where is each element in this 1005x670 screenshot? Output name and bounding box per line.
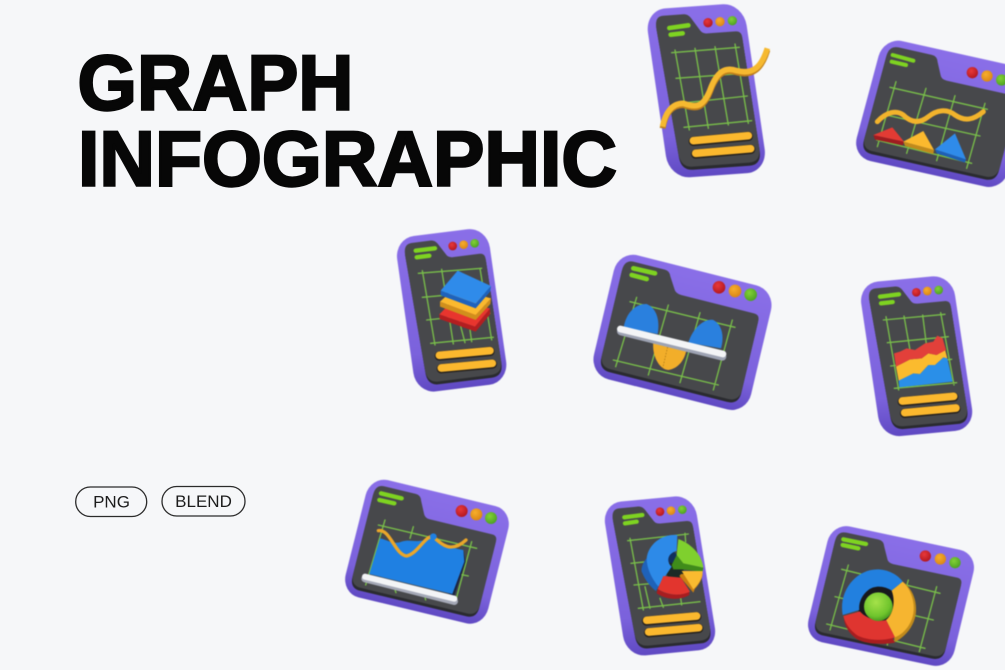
icon: window with line and triangle chart xyxy=(852,37,1005,191)
icon: window with donut chart xyxy=(804,523,978,669)
format tag: PNG: PNG xyxy=(93,492,130,512)
icon: window with blue area chart xyxy=(341,476,513,627)
format tag: BLEND xyxy=(162,486,245,516)
icon: phone with 3D pie chart xyxy=(602,495,718,657)
title xyxy=(78,38,617,202)
title: INFOGRAPHIC xyxy=(78,114,617,202)
format tag: BLEND: BLEND xyxy=(175,492,232,511)
title: GRAPH xyxy=(78,38,354,126)
icon: window with seesaw ellipse chart xyxy=(589,251,776,414)
format tag: PNG xyxy=(76,487,147,516)
icon: phone with stacked area chart xyxy=(858,275,975,438)
icon: phone with stacked layers xyxy=(394,227,509,394)
icon: phone with line chart xyxy=(645,3,768,179)
